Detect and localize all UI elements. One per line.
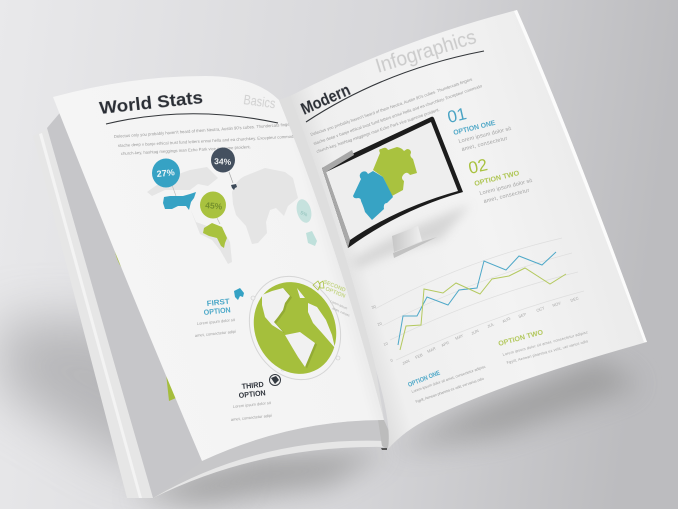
axis labels: AUG bbox=[501, 316, 511, 324]
world map bbox=[147, 167, 298, 264]
icon: globe badge bbox=[270, 374, 280, 386]
callout: 45% Brazil bbox=[200, 192, 227, 248]
icon: cluster bbox=[313, 281, 324, 290]
option: second bbox=[313, 279, 351, 318]
axis labels: 30 bbox=[371, 303, 377, 310]
USA shape bbox=[163, 192, 196, 210]
option 01: OPTION ONE bbox=[453, 120, 497, 137]
floor shadows bbox=[0, 320, 640, 505]
right page bbox=[290, 10, 647, 449]
series: option one bbox=[398, 252, 556, 345]
callout: 45% Brazil: 45% bbox=[205, 200, 223, 212]
chart note: option two: OPTION TWO bbox=[498, 329, 544, 348]
back pages of left stack bbox=[33, 95, 240, 498]
heading: Infographics: Infographics bbox=[373, 26, 479, 78]
intro paragraph: church-key, hashtag meggings man Echo Park vice supreme proident. bbox=[316, 107, 440, 154]
callout: faded Australia bbox=[294, 198, 317, 246]
axis labels: SEP bbox=[518, 311, 527, 319]
chart note: option one: Fgyilt, Aenean pharetra ex velit, vel varius odio bbox=[415, 377, 484, 404]
series: option two bbox=[400, 268, 566, 350]
option: third: THIRD bbox=[241, 380, 265, 391]
monitor screen bbox=[326, 122, 458, 240]
chart note: option two: Lorem ipsum dolor sit amet, consectetur adipisc bbox=[502, 330, 588, 357]
option: second: OPTION bbox=[324, 286, 346, 300]
option 02 bbox=[467, 155, 533, 205]
option 02: amet, consectetur bbox=[483, 188, 530, 205]
heading: Modern: Modern bbox=[298, 80, 353, 119]
heading: World Stats: World Stats bbox=[98, 87, 204, 118]
callout: faded Australia: 5% bbox=[299, 210, 309, 219]
globe bbox=[233, 262, 357, 394]
callout: 27% USA: 27% bbox=[156, 167, 175, 179]
axis labels: APR bbox=[440, 340, 450, 348]
option 01: 01 bbox=[446, 104, 468, 127]
monitor bezel bbox=[322, 117, 463, 248]
monitor shadow bbox=[350, 205, 470, 268]
option: first: OPTION bbox=[203, 305, 231, 317]
option 02: 02 bbox=[467, 155, 489, 178]
line chart bbox=[371, 238, 584, 366]
option: third: Lorem ipsum dolor sit bbox=[233, 400, 272, 409]
intro paragraph bbox=[114, 121, 296, 156]
axis labels: 10 bbox=[383, 340, 389, 347]
option: second: Lorem ipsum bbox=[330, 299, 348, 311]
globe continents bbox=[262, 288, 335, 367]
chart note: option one: OPTION ONE bbox=[407, 369, 442, 389]
option 02: OPTION TWO bbox=[474, 170, 521, 188]
heading: Basics: Basics bbox=[243, 91, 276, 111]
option: first: Lorem ipsum dolor sit bbox=[197, 317, 236, 326]
heading rule bbox=[306, 51, 484, 122]
monitor bbox=[322, 117, 470, 268]
callout: 27% USA bbox=[152, 158, 196, 210]
grid lines bbox=[375, 238, 584, 360]
heading rule bbox=[106, 114, 278, 124]
callout: 34% Europe: 34% bbox=[214, 156, 232, 167]
axis labels: OCT bbox=[536, 305, 546, 313]
globe sphere bbox=[239, 269, 351, 387]
icon: puzzle bbox=[234, 288, 244, 300]
option: first: amet, consectetur adipi bbox=[195, 329, 236, 338]
intro paragraph: stache deep v banjo ethical trust fund letters ennui hella and ea churchkey. Excepteur commodo bbox=[118, 134, 296, 148]
option 01 bbox=[446, 104, 512, 153]
chart note: option one: Lorem ipsum dolor sit amet, consectetur adipisc bbox=[411, 365, 486, 394]
axis labels: MAR bbox=[426, 346, 437, 354]
intro paragraph: stache deep v banjo ethical trust fund letters ennui hella and ea churchkey. Excepteur commodo bbox=[313, 83, 483, 146]
globe continents shadow bbox=[264, 290, 317, 368]
option: first: FIRST bbox=[206, 297, 231, 308]
monitor stand bbox=[392, 226, 422, 252]
axis labels: JUL bbox=[486, 321, 496, 329]
green bleed shapes on under page bbox=[114, 246, 176, 401]
intro paragraph: Delectus you probably haven't heard of them Neutra, Austin 90's cubes. Thundercats fingers bbox=[310, 77, 473, 137]
axis labels: JAN bbox=[401, 358, 410, 366]
chart note: option two: Fgyilt, Aenean pharetra ex velit, vel varius odio bbox=[506, 339, 588, 365]
gutter shadow bbox=[279, 96, 384, 420]
axis labels: 0 bbox=[390, 357, 394, 363]
option 02: Lorem ipsum dolor sit bbox=[479, 178, 533, 197]
axis labels: MAY bbox=[454, 333, 464, 341]
intro paragraph: Delectus only you probably haven't heard of them Neutra, Austin 90's cubes. Thundercats fingers bbox=[114, 121, 293, 139]
axis labels: NOV bbox=[552, 300, 562, 308]
axis labels: JUN bbox=[470, 328, 480, 336]
option 01: amet, consectetur bbox=[461, 136, 508, 153]
axis labels: DEC bbox=[570, 295, 579, 303]
book bottom page block bbox=[153, 420, 392, 498]
option: first bbox=[195, 288, 244, 338]
option 01: Lorem ipsum dolor sit bbox=[458, 126, 512, 145]
intro paragraph: church-key, hashtag meggings man Echo Park vice supreme proident. bbox=[121, 144, 251, 156]
option: third: amet, consectetur adipi bbox=[231, 413, 272, 422]
option: second: amet, consec bbox=[332, 306, 351, 318]
axis labels: FEB bbox=[414, 352, 424, 360]
puzzle piece: blue bbox=[353, 171, 393, 220]
option: third: OPTION bbox=[238, 388, 266, 400]
option: second: SECOND bbox=[322, 279, 346, 294]
left page bbox=[53, 76, 384, 461]
puzzle piece: green bbox=[373, 147, 417, 196]
globe ring bbox=[233, 262, 357, 394]
axis labels: 20 bbox=[377, 320, 383, 327]
callout: 34% Europe bbox=[211, 148, 237, 190]
axis labels bbox=[371, 295, 579, 366]
option: third bbox=[231, 374, 280, 422]
